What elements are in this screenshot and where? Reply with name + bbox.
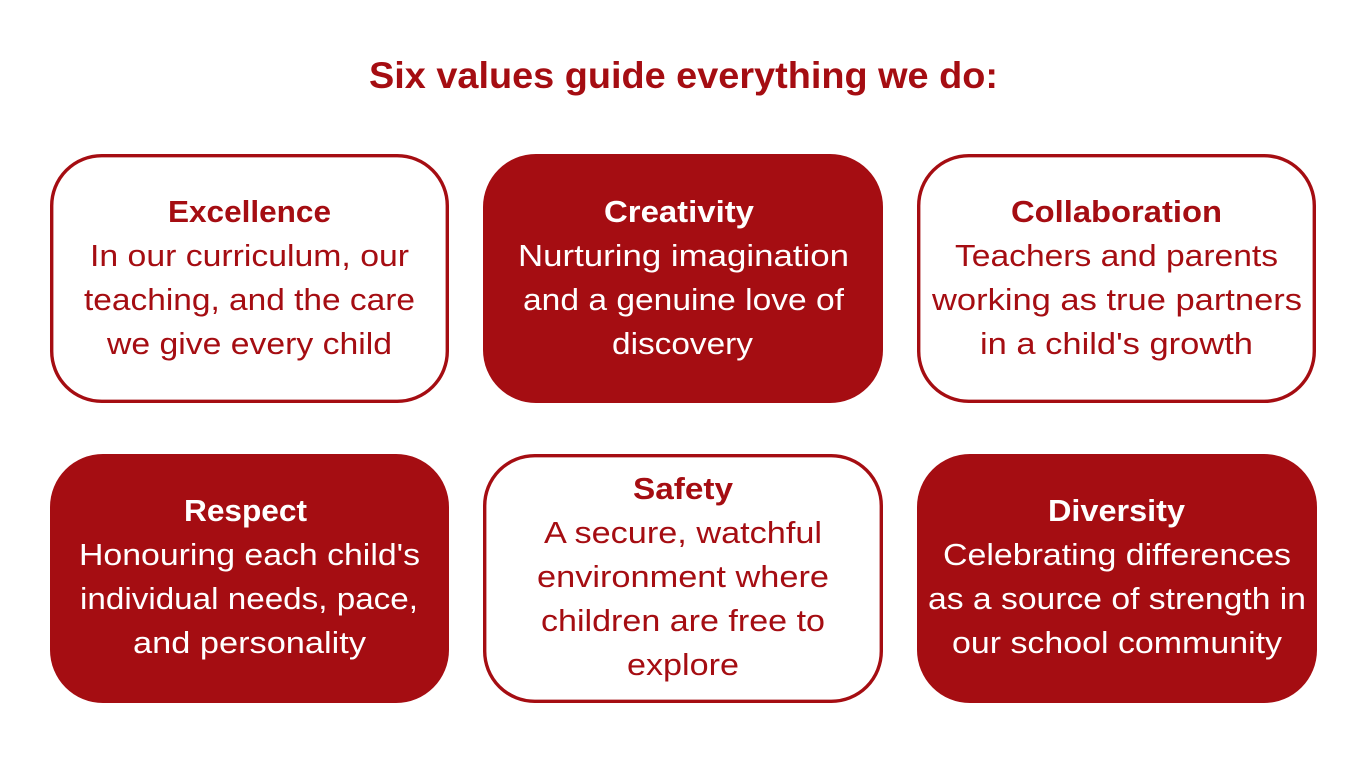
text: Respect description: Honouring each child's [79,537,420,572]
text: Respect description [79,537,420,660]
text: Collaboration description: working as true partners [931,282,1302,317]
text: Creativity description [518,238,849,361]
panel: Collaboration [919,156,1314,401]
text: Safety description: children are free to [541,603,825,638]
heading: Diversity: Diversity [1048,493,1186,528]
text: Excellence description: In our curriculum, our [90,238,409,273]
text: Diversity description: our school community [952,625,1283,660]
text: Creativity description: and a genuine love of [523,282,844,317]
title: Six values guide everything we do: [369,55,998,96]
text: Excellence description [84,238,415,361]
text: Creativity description: discovery [612,326,754,361]
heading: Safety: Safety [633,471,734,506]
panel: Safety [485,456,881,701]
text: Diversity description [928,537,1306,660]
heading: Collaboration: Collaboration [1011,194,1222,229]
text: Collaboration description: Teachers and parents [955,238,1278,273]
heading: Creativity: Creativity [604,194,755,229]
text: Collaboration description: in a child's growth [980,326,1253,361]
text: Respect description: and personality [133,625,367,660]
text: Safety description: explore [627,647,739,682]
text: Diversity description: as a source of strength in [928,581,1306,616]
panel: Excellence [52,156,447,401]
text: Safety description: A secure, watchful [544,515,822,550]
text: Collaboration description [931,238,1302,361]
text: Excellence description: we give every child [106,326,392,361]
panel: Creativity [483,154,883,403]
heading: Excellence: Excellence [168,194,331,229]
text: Respect description: individual needs, pace, [80,581,418,616]
panel: Diversity [917,454,1317,703]
text: Creativity description: Nurturing imagination [518,238,849,273]
text: Safety description: environment where [537,559,829,594]
text: Diversity description: Celebrating differences [943,537,1291,572]
text: Safety description [537,515,829,682]
heading: Respect: Respect [184,493,307,528]
text: Excellence description: teaching, and the care [84,282,415,317]
panel: Respect [50,454,449,703]
